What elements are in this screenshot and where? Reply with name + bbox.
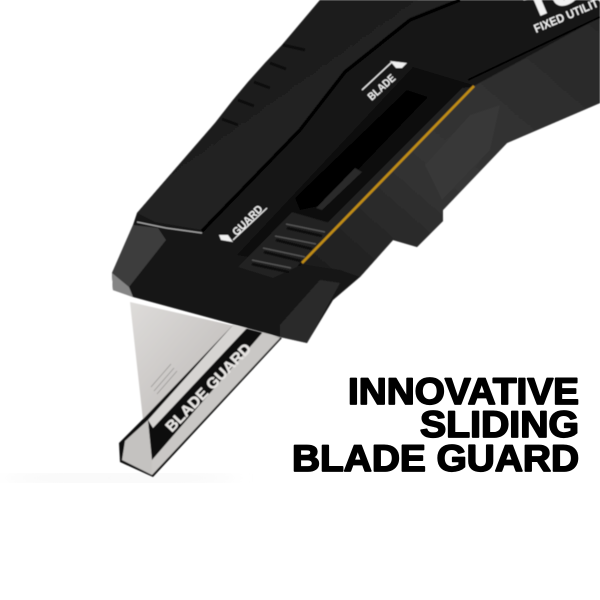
- guard marking: GUARD: [230, 203, 266, 239]
- blade guard strip: [119, 325, 282, 477]
- handle highlight facet: [425, 105, 500, 200]
- handle seam: [468, 17, 600, 80]
- nose tip: [112, 273, 133, 297]
- ground shadow: [0, 474, 240, 482]
- blade marking: [362, 61, 407, 103]
- front highlight line: [137, 222, 202, 233]
- blade marking: BLADE: [366, 72, 398, 103]
- headline line 2: SLIDING: [420, 404, 579, 445]
- knife silhouette: [112, 0, 600, 343]
- headline: [292, 371, 579, 479]
- upper grip: [137, 0, 460, 230]
- slider button: [238, 212, 330, 278]
- blade etching: [151, 364, 177, 394]
- nose cap: [112, 225, 166, 290]
- utility knife: [112, 0, 600, 477]
- guard marking: [219, 203, 267, 242]
- lower handle: [302, 17, 600, 277]
- guard label: BLADE GUARD: [162, 340, 255, 436]
- grip lower edge groove: [202, 0, 460, 231]
- headline line 3: BLADE GUARD: [292, 438, 579, 479]
- grip ribs: [222, 45, 305, 125]
- blade slot: [237, 67, 473, 266]
- gold blade track: [302, 86, 474, 263]
- headline line 1: INNOVATIVE: [348, 371, 579, 412]
- blade: [130, 302, 235, 420]
- front body facet: [280, 280, 340, 343]
